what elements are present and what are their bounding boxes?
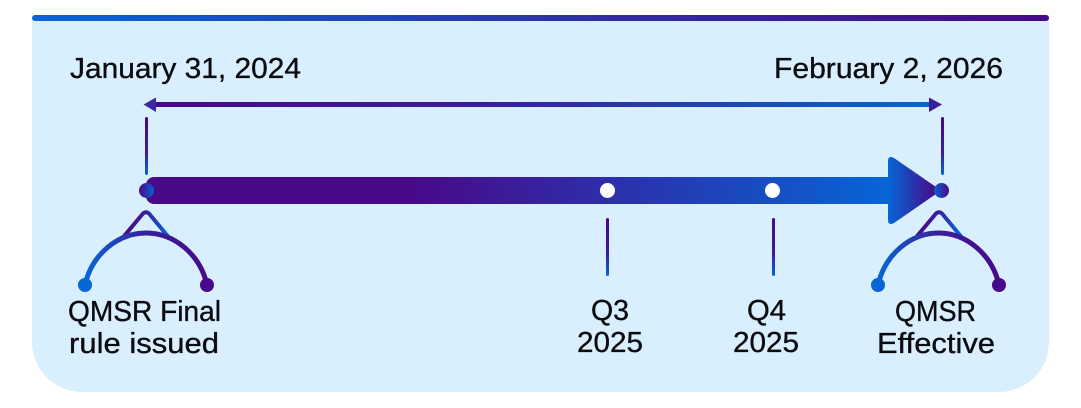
- label: QMSR Final rule issued: rule issued: [69, 328, 219, 360]
- label: QMSR Effective: [877, 296, 995, 360]
- marker: Q4 2025 dot: [765, 183, 780, 198]
- label: Q4 2025: Q4: [747, 295, 786, 327]
- marker: Q3 2025 dot: [600, 183, 615, 198]
- start date label: January 31, 2024: [70, 53, 301, 85]
- end date label: February 2, 2026: [774, 53, 1003, 85]
- marker: end dot: [934, 183, 949, 198]
- label: Q3 2025: [577, 295, 643, 359]
- label: QMSR Effective: QMSR: [895, 296, 976, 328]
- label: QMSR Final rule issued: [68, 296, 221, 360]
- tick: Q4 2025: [772, 218, 775, 276]
- label: Q4 2025: 2025: [733, 327, 799, 359]
- arrow: date span: [144, 98, 942, 112]
- label: Q4 2025: [733, 295, 799, 359]
- tick: end: [941, 117, 944, 175]
- label: Q3 2025: Q3: [591, 295, 629, 327]
- arrow: main timeline: [146, 157, 938, 224]
- label: QMSR Effective: Effective: [877, 328, 995, 360]
- icon: start bracket: [78, 212, 214, 292]
- tick: Q3 2025: [606, 218, 609, 276]
- label: Q3 2025: 2025: [577, 327, 643, 359]
- icon: end bracket: [871, 212, 1006, 292]
- tick: start: [145, 117, 148, 175]
- label: QMSR Final rule issued: QMSR Final: [68, 296, 221, 328]
- top accent bar: [32, 15, 1049, 21]
- marker: start dot: [139, 183, 154, 198]
